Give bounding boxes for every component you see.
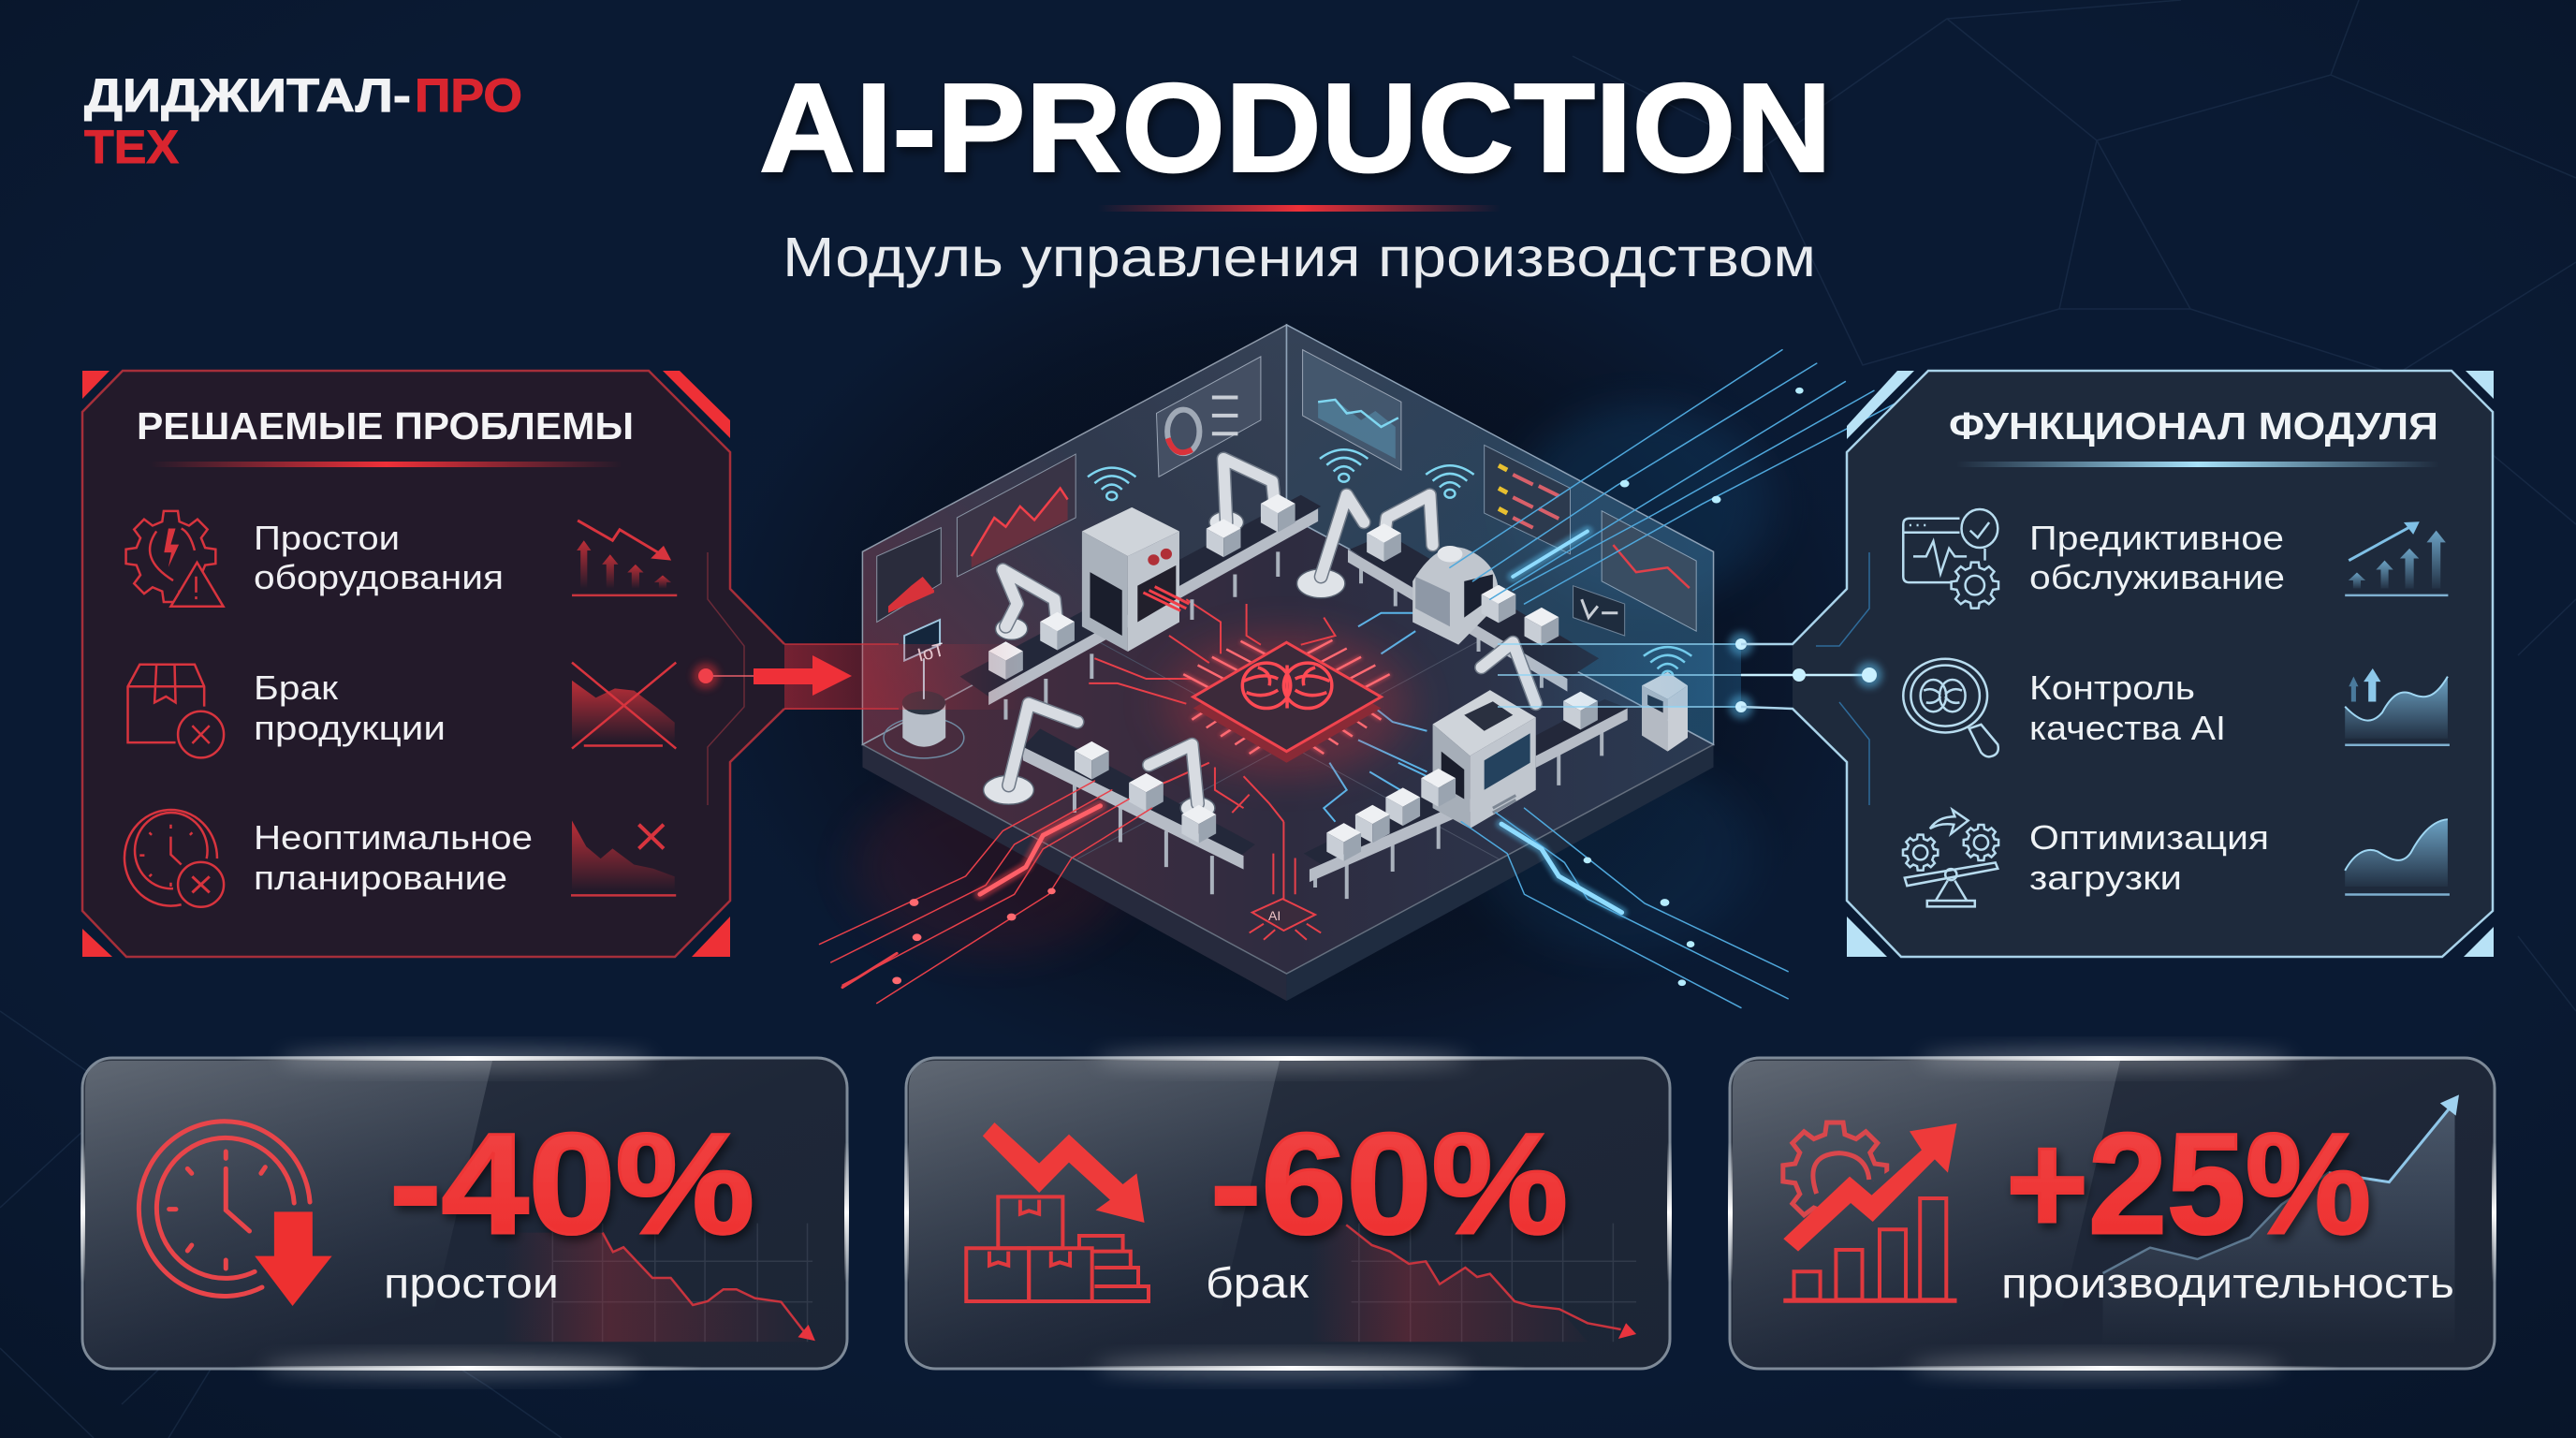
item: planning: [124, 810, 676, 907]
label: AI: AI: [1268, 908, 1281, 923]
text: [254, 668, 446, 747]
chart: falling defects: [1310, 1224, 1636, 1342]
title: AI-PRODUCTION: [759, 57, 1832, 198]
machine: right gate: [1412, 546, 1499, 645]
platform base: [862, 516, 1714, 1001]
logo: [84, 69, 522, 173]
dashboard: trend: [1602, 511, 1696, 631]
machine: kiosk: [1642, 672, 1688, 752]
item: predictive maintenance: [1903, 509, 2448, 609]
dashboards on glass walls: [877, 350, 1696, 636]
product boxes: [988, 494, 1598, 861]
KPI card: defects: [904, 1048, 1672, 1378]
wifi icons: [1088, 449, 1691, 680]
text: загрузки: [2029, 858, 2182, 897]
glows: [854, 404, 1771, 958]
panel: problems: [82, 371, 1028, 957]
text: [254, 818, 533, 897]
text: [254, 519, 504, 596]
central AI chip: [1166, 631, 1407, 776]
dark halo behind illustration: [708, 215, 1868, 1095]
central illustration: isometric AI factory: [820, 325, 1903, 1007]
arrow into factory: [693, 655, 852, 696]
right connector lines: [1498, 632, 1799, 719]
mini chart: rising bars: [2345, 521, 2448, 595]
item: AI quality control: [1903, 659, 2450, 756]
heading underline: [150, 462, 622, 467]
mini chart: falling bars: [572, 521, 677, 595]
icon: clock with cross: [124, 810, 224, 907]
KPI card: downtime: [80, 1048, 849, 1378]
dashboard: red line: [957, 454, 1076, 577]
robot arms: [984, 459, 1536, 819]
circuit traces on floor: [1089, 599, 1427, 822]
text: продукции: [254, 709, 446, 747]
dashboard: status list: [1485, 445, 1570, 554]
card frame: [1728, 1048, 2496, 1378]
text: [2029, 519, 2285, 596]
blue data lines: [1450, 350, 1903, 1007]
chart: rising productivity: [2103, 1094, 2459, 1345]
text: Простои: [254, 519, 400, 557]
dashboard: donut: [1156, 357, 1261, 477]
machine: lower right: [1433, 690, 1536, 829]
text: Неоптимальное: [254, 818, 533, 857]
icon: boxes with falling arrow: [966, 1123, 1149, 1301]
mini chart: growth area: [2345, 819, 2450, 895]
card frame: [904, 1048, 1672, 1378]
conveyor: lower right: [1304, 699, 1628, 899]
icon: gear, arrow and bars: [1783, 1123, 1956, 1300]
item: equipment downtime: [126, 511, 677, 607]
mini chart: crossed area: [572, 663, 676, 749]
card frame: [80, 1048, 849, 1378]
label: IoT: IoT: [915, 639, 946, 667]
connector band to factory: [784, 644, 1028, 710]
chart: falling downtime: [503, 1224, 815, 1342]
value: -60%: [1210, 1104, 1568, 1264]
text: планирование: [254, 858, 507, 897]
text: [2029, 818, 2269, 897]
conveyor belts: [960, 495, 1628, 899]
logo accent: ПРО: [415, 69, 522, 122]
IoT sensor: [884, 620, 964, 758]
item: defects: [128, 663, 676, 757]
label: брак: [1206, 1259, 1309, 1307]
conveyor: upper left: [960, 495, 1321, 720]
icon: brain in magnifier: [1903, 659, 1998, 756]
item: load optimisation: [1903, 810, 2450, 906]
text: обслуживание: [2029, 558, 2285, 596]
heading underline: [1956, 462, 2439, 467]
panel: module features: [1741, 371, 2494, 957]
panel frame: [1741, 371, 2493, 957]
subtitle: Модуль управления производством: [783, 227, 1816, 288]
text: Предиктивное: [2029, 519, 2284, 557]
mini chart: low area: [571, 820, 676, 895]
text: [2029, 668, 2226, 747]
icon: monitor, check and gear: [1903, 509, 1998, 609]
machine: left gate: [1082, 507, 1189, 652]
text: оборудования: [254, 558, 504, 596]
dashboard: blue line: [1303, 350, 1401, 470]
inner connector tracery: [708, 552, 744, 805]
value: -40%: [389, 1104, 754, 1264]
glass walls: [862, 325, 1714, 744]
mini chart: rising area: [2345, 668, 2450, 745]
text: Брак: [254, 668, 338, 707]
inner connector dots: [1741, 552, 1882, 805]
dashboard: red area: [877, 528, 941, 622]
text: Оптимизация: [2029, 818, 2269, 857]
dashboard: small: [1573, 586, 1625, 636]
text: качества AI: [2029, 709, 2226, 747]
logo line two: ТЕХ: [84, 121, 179, 173]
panel heading: ФУНКЦИОНАЛ МОДУЛЯ: [1949, 404, 2438, 448]
label: производительность: [2001, 1259, 2454, 1307]
icon: gear with warning: [126, 511, 224, 607]
red data lines: [820, 781, 1152, 1004]
icon: gears on balance: [1903, 810, 1998, 906]
title divider: [1098, 205, 1500, 212]
text: Контроль: [2029, 668, 2195, 707]
panel heading: РЕШАЕМЫЕ ПРОБЛЕМЫ: [137, 404, 634, 448]
small AI chip: [1250, 822, 1321, 940]
processing machines: [1082, 507, 1688, 829]
logo line one: ДИДЖИТАЛ-: [84, 69, 411, 122]
icon: clock with down arrow: [139, 1122, 332, 1306]
label: простои: [384, 1259, 559, 1307]
conveyor: upper right: [1348, 534, 1599, 692]
corner accents: [1847, 371, 2494, 957]
icon: brain: [1242, 663, 1332, 709]
KPI card: productivity: [1728, 1048, 2496, 1378]
icon: box with cross: [128, 665, 224, 757]
value: +25%: [2006, 1104, 2371, 1264]
panel frame: [82, 371, 899, 957]
conveyor: lower left: [1023, 728, 1255, 894]
corner accents: [82, 371, 730, 957]
